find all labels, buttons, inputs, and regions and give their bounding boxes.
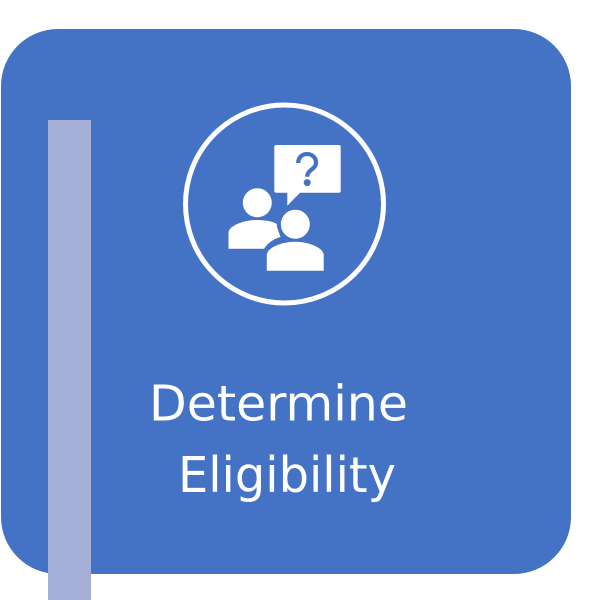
heading: Determine Eligibility: Determine [149,376,408,432]
icon: person right [267,209,324,271]
icon: two people with question speech bubble in circle [186,105,384,303]
icon: speech bubble [274,145,341,206]
heading: Determine Eligibility [149,376,408,504]
icon: question mark [298,154,316,186]
icon: person left [228,188,280,249]
vertical accent bar [48,120,91,600]
heading: Determine Eligibility: Eligibility [178,447,396,504]
